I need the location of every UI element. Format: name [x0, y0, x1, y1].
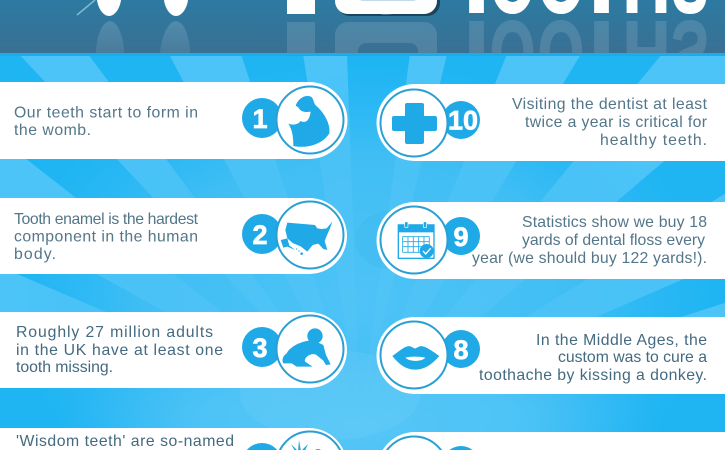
- fact 2 text: body.: [14, 246, 56, 263]
- title reflection: [287, 20, 706, 53]
- panel: fact 4: [0, 428, 347, 450]
- icon: lips: [380, 322, 448, 388]
- fact 1 text: the womb.: [14, 122, 91, 139]
- number 3: 3: [252, 333, 268, 363]
- number 8: [442, 330, 480, 368]
- number 8: 8: [453, 335, 469, 365]
- fact 3 text: tooth missing.: [16, 359, 113, 376]
- panel: fact 1: [0, 82, 347, 159]
- fact 10 text: [512, 96, 708, 149]
- number 9: 9: [453, 222, 469, 252]
- title reflection: H: [623, 3, 670, 102]
- fact 2 text: [14, 211, 199, 263]
- fact 1 text: [14, 104, 198, 139]
- fact 3 text: [16, 324, 223, 376]
- number 7: [442, 446, 480, 450]
- fact 8 text: toothache by kissing a donkey.: [479, 367, 707, 384]
- fact 9 text: year (we should buy 122 yards!).: [472, 250, 707, 267]
- fact 3 text: Roughly 27 million adults: [16, 324, 213, 341]
- fact 8 text: custom was to cure a: [558, 349, 707, 366]
- fact 8 text: [479, 332, 707, 384]
- fact 2 text: component in the human: [14, 228, 198, 246]
- panel: fact 2: [0, 198, 347, 274]
- fact 3 text: in the UK have at least one: [16, 342, 223, 359]
- number 10: [442, 101, 480, 139]
- logo teeth: [97, 0, 188, 16]
- title reflection: O: [538, 3, 584, 102]
- sparkle: [77, 0, 95, 15]
- fact 8 text: In the Middle Ages, the: [536, 332, 707, 349]
- header band: [0, 0, 725, 56]
- fact 10 text: twice a year is critical for: [525, 114, 707, 131]
- fact 10 text: healthy teeth.: [600, 132, 707, 149]
- panel: fact 7: [377, 432, 725, 450]
- title reflection: T: [450, 3, 503, 102]
- number 1: 1: [252, 104, 268, 134]
- icon: calendar: [380, 206, 448, 274]
- number 2: 2: [252, 220, 268, 250]
- icon: flexed arm: [276, 86, 344, 154]
- title reflection: T: [575, 3, 628, 102]
- icon: sunburst: [276, 432, 344, 450]
- fact 4 text: 'Wisdom teeth' are so-named: [16, 433, 234, 450]
- icon: medical cross: [380, 90, 448, 156]
- fact 9 text: Statistics show we buy 18: [522, 214, 707, 231]
- fact 9 text: [472, 214, 707, 267]
- fact 2 text: Tooth enamel is the hardest: [14, 211, 199, 228]
- title reflection: O: [490, 3, 535, 102]
- panel: fact 9: [376, 202, 725, 279]
- fact 10 text: Visiting the dentist at least: [512, 96, 708, 113]
- icon: crawling baby: [276, 316, 344, 382]
- number 9: [442, 217, 480, 255]
- icon ring: [380, 436, 448, 450]
- number 3: [242, 327, 282, 367]
- panel: fact 3: [0, 312, 347, 388]
- number 10: 10: [448, 106, 478, 136]
- logo teeth reflection: [96, 21, 190, 53]
- number 1: [242, 98, 282, 138]
- number 2: [242, 214, 282, 254]
- panel: fact 10: [377, 84, 725, 161]
- panel: fact 8: [376, 317, 725, 394]
- icon: USA map: [276, 202, 344, 268]
- fact 9 text: yards of dental floss every: [522, 232, 705, 249]
- title: [287, 0, 708, 41]
- number 4: [242, 443, 282, 450]
- fact 1 text: Our teeth start to form in: [14, 104, 198, 122]
- title shadow: [337, 0, 440, 16]
